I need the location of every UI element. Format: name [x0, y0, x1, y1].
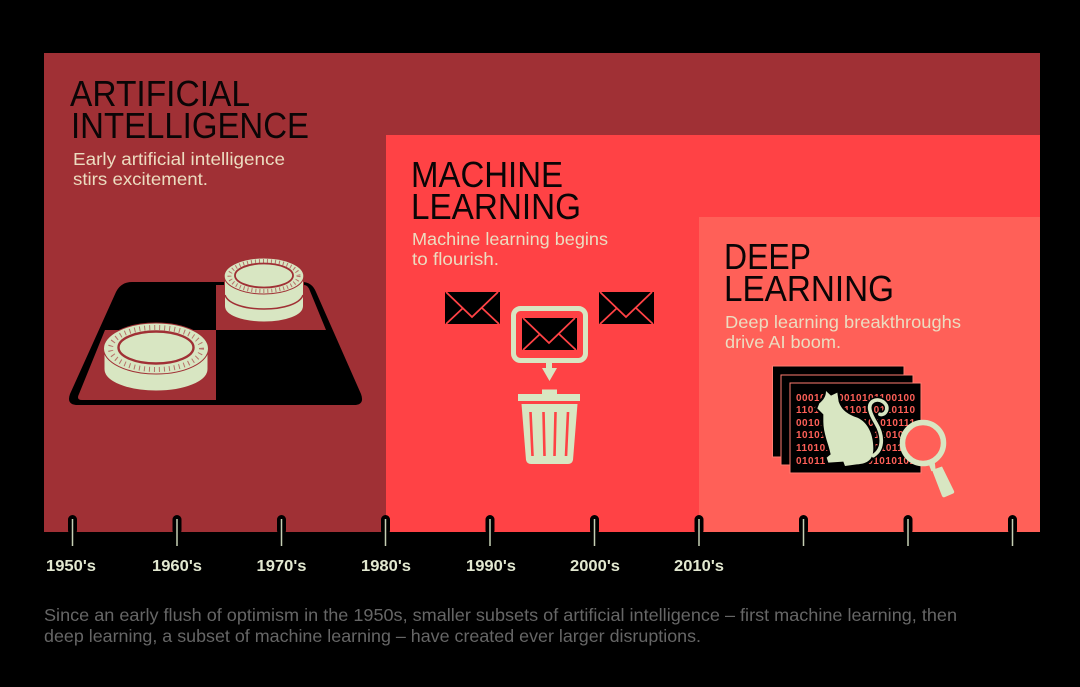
caption: deep learning, a subset of machine learning – have created ever larger disruptions. — [44, 626, 701, 646]
binary digits — [796, 393, 915, 467]
panel: deep learning — [699, 217, 1040, 532]
icon: selected envelope box — [514, 308, 586, 360]
arrow: down to trash — [542, 362, 557, 381]
caption: Since an early flush of optimism in the 1950s, smaller subsets of artificial intelligence – first machine learning, then — [44, 605, 957, 625]
icon: magnifying glass — [902, 422, 954, 497]
decade labels: 2010's — [674, 558, 724, 575]
text: DL description: drive AI boom. — [725, 332, 841, 352]
decade labels: 1970's — [256, 558, 307, 575]
caption — [44, 605, 957, 646]
text: AI description — [73, 149, 285, 189]
icon: stacked checker — [224, 258, 304, 322]
binary digits: 11010101001010101101 — [796, 443, 915, 454]
text: DL description — [725, 312, 961, 352]
heading: machine learning: MACHINE — [411, 154, 563, 195]
heading: machine learning — [411, 154, 581, 227]
text: ML description: to flourish. — [412, 249, 499, 269]
decade labels: 2000's — [570, 558, 620, 575]
text: ML description: Machine learning begins — [412, 229, 608, 249]
text: AI description: Early artificial intelligence — [73, 149, 285, 169]
icon: envelope left — [445, 292, 500, 324]
panel: machine learning — [386, 135, 1040, 532]
icon: single checker — [104, 323, 208, 391]
decade labels: 1980's — [361, 558, 411, 575]
binary digits: 00010010010101100100 — [796, 393, 915, 404]
binary digits: 10101010110101101011 — [796, 430, 915, 441]
text: DL description: Deep learning breakthroughs — [725, 312, 961, 332]
heading: deep learning: LEARNING — [724, 268, 894, 309]
image sheets — [772, 366, 921, 473]
timeline — [46, 515, 1017, 575]
icon: checkers board — [69, 258, 362, 405]
icon: cat image recognition — [772, 366, 954, 497]
decade labels — [46, 558, 724, 575]
heading: deep learning: DEEP — [724, 236, 811, 277]
binary digits: 01011010110101010101 — [796, 456, 915, 467]
decade labels: 1950's — [46, 558, 96, 575]
icon: spam email to trash — [445, 292, 654, 464]
decade labels: 1960's — [152, 558, 202, 575]
heading: machine learning: LEARNING — [411, 186, 581, 227]
binary digits: 00101101010101010111 — [796, 418, 915, 429]
text: AI description: stirs excitement. — [73, 169, 208, 189]
heading: deep learning — [724, 236, 894, 309]
heading: artificial intelligence: ARTIFICIAL — [70, 73, 250, 114]
icon: cat — [817, 391, 887, 466]
binary digits: 11010110110110110110 — [796, 405, 915, 416]
heading: artificial intelligence: INTELLIGENCE — [71, 105, 309, 146]
icon: trash can — [518, 390, 580, 464]
icon: envelope right — [599, 292, 654, 324]
heading: artificial intelligence — [70, 73, 309, 146]
decade labels: 1990's — [466, 558, 516, 575]
text: ML description — [412, 229, 608, 269]
panel: artificial intelligence — [44, 53, 1040, 532]
